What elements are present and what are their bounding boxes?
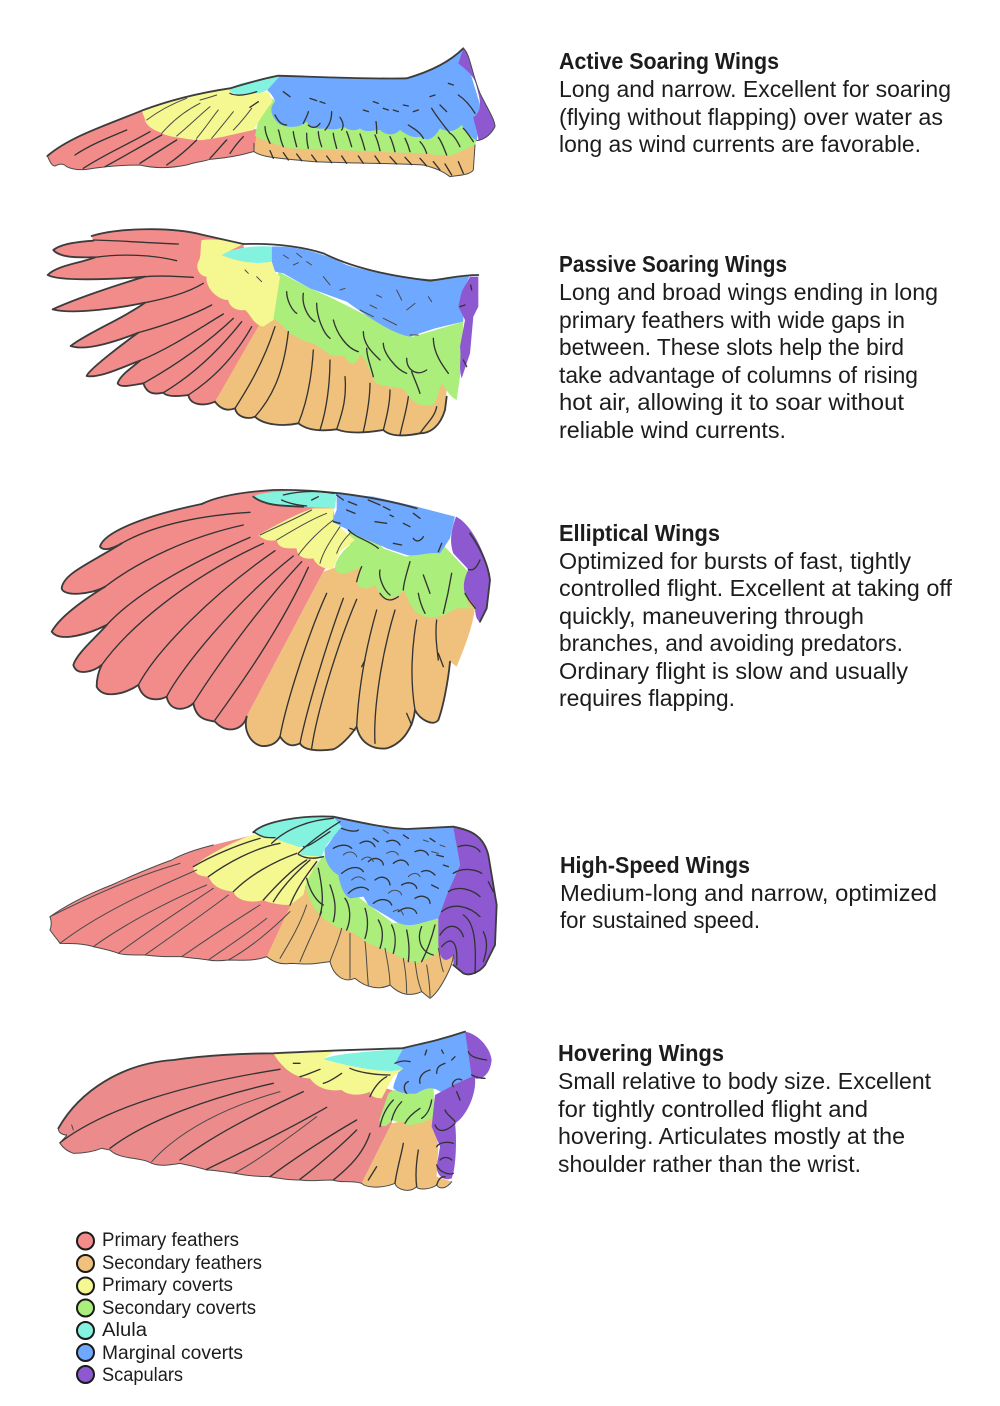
heading and description: elliptical: Optimized for bursts of fast, tightly — [559, 548, 912, 574]
heading and description: passive soaring: Passive Soaring Wings — [559, 251, 787, 277]
heading and description: hovering: shoulder rather than the wrist. — [558, 1151, 861, 1177]
feather lines: active soaring — [75, 83, 475, 175]
legend: Alula — [102, 1320, 147, 1341]
legend: Marginal coverts — [102, 1343, 243, 1364]
heading and description: hovering: Small relative to body size. Excellent — [558, 1068, 932, 1094]
outline: passive soaring — [48, 229, 478, 436]
heading and description: passive soaring: Long and broad wings ending in long — [559, 279, 938, 305]
legend: Secondary feathers — [102, 1253, 262, 1274]
heading and description: hovering: hovering. Articulates mostly at the — [558, 1123, 905, 1149]
heading and description: passive soaring: hot air, allowing it to soar without — [559, 389, 905, 415]
heading and description: active soaring: long as wind currents are favorable. — [559, 131, 921, 157]
heading and description: high-speed — [560, 852, 937, 933]
heading and description: active soaring: Long and narrow. Excellent for soaring — [559, 76, 951, 102]
wing: elliptical — [52, 490, 490, 750]
heading and description: hovering: for tightly controlled flight and — [558, 1096, 868, 1122]
wing: passive soaring — [48, 229, 478, 436]
heading and description: passive soaring: reliable wind currents. — [559, 417, 786, 443]
outline: high-speed — [50, 816, 497, 998]
feather lines: passive soaring — [93, 240, 472, 435]
wing: active soaring — [47, 48, 495, 177]
heading and description: passive soaring — [559, 251, 938, 443]
heading and description: active soaring: (flying without flapping) over water as — [559, 104, 943, 130]
heading and description: elliptical: controlled flight. Excellent at taking off — [559, 575, 953, 601]
heading and description: elliptical: Elliptical Wings — [559, 520, 720, 546]
feather lines: elliptical — [102, 492, 480, 748]
legend: Scapulars — [102, 1365, 183, 1386]
heading and description: passive soaring: primary feathers with wide gaps in — [559, 307, 905, 333]
legend: Primary coverts — [102, 1275, 233, 1296]
wing: high-speed — [50, 816, 497, 998]
heading and description: elliptical: branches, and avoiding predators. — [559, 630, 903, 656]
outline: elliptical — [52, 490, 490, 750]
feather lines: hovering — [60, 1050, 487, 1187]
heading and description: hovering: Hovering Wings — [558, 1040, 724, 1066]
heading and description: passive soaring: between. These slots help the bird — [559, 334, 904, 360]
heading and description: elliptical: requires flapping. — [559, 685, 735, 711]
heading and description: elliptical: Ordinary flight is slow and usually — [559, 658, 908, 684]
heading and description: elliptical: quickly, maneuvering through — [559, 603, 864, 629]
heading and description: high-speed: for sustained speed. — [560, 907, 760, 933]
heading and description: high-speed: High-Speed Wings — [560, 852, 750, 878]
outline: hovering — [58, 1032, 465, 1190]
heading and description: passive soaring: take advantage of columns of rising — [559, 362, 918, 388]
outline: active soaring — [47, 48, 495, 177]
heading and description: high-speed: Medium-long and narrow, optimized — [560, 880, 937, 906]
heading and description: hovering — [558, 1040, 932, 1177]
legend: Secondary coverts — [102, 1298, 256, 1319]
legend — [77, 1230, 262, 1386]
heading and description: elliptical — [559, 520, 953, 711]
heading and description: active soaring: Active Soaring Wings — [559, 48, 779, 74]
feather lines: high-speed — [50, 818, 493, 997]
heading and description: active soaring — [559, 48, 951, 157]
legend: Primary feathers — [102, 1230, 239, 1251]
wing: hovering — [58, 1032, 492, 1190]
